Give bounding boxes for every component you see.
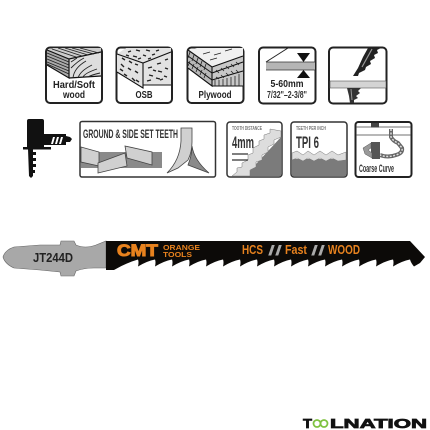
icon: teeth per inch [291, 122, 347, 177]
panel: ground and side set teeth [80, 122, 216, 177]
jigsaw blade [3, 241, 425, 276]
value: 4mm: 4mm [232, 133, 254, 152]
arrow: top thickness [297, 53, 310, 62]
icon: coarse curve: Coarse Curve [359, 163, 394, 175]
arrow: bottom thickness [297, 70, 310, 78]
icon: blade cut [329, 48, 386, 104]
heading: ground and side set teeth: GROUND & SIDE SET TEETH [83, 127, 178, 141]
label: OSB: OSB [136, 89, 153, 101]
blade body [106, 241, 425, 270]
blade part number: JT244D [33, 251, 73, 265]
blade spec: HCS: HCS [242, 243, 263, 257]
divider slashes: // [311, 242, 325, 258]
blade spec: WOOD: WOOD [328, 243, 360, 257]
value: TPI 6: TPI 6 [296, 133, 319, 152]
label: Plywood: Plywood [198, 89, 232, 101]
icon: plywood [188, 48, 244, 103]
label: tooth distance: TOOTH DISTANCE [232, 126, 262, 132]
icon: hard/soft wood [46, 48, 102, 103]
divider slashes: // [268, 242, 282, 258]
blade shank [3, 241, 106, 276]
blade spec: Fast: Fast [285, 243, 308, 257]
label: Hard/Soft wood: Hard/Soft [53, 79, 95, 91]
icon: hard/soft wood: wood [62, 89, 85, 101]
icon: tooth distance [227, 122, 282, 177]
label: teeth per inch: TEETH PER INCH [296, 126, 326, 132]
brand: orange tools: ORANGE [163, 243, 200, 252]
icon: OSB [116, 48, 172, 103]
icon: jigsaw [23, 119, 72, 178]
brand: CMT: CMT [117, 242, 158, 260]
label: 5-60mm: 5-60mm [270, 78, 304, 90]
icon: cutting thickness: 7/32"–2-3/8" [267, 90, 307, 101]
jigsaw blade: TOOLS [163, 250, 192, 259]
icon: cutting thickness [259, 48, 316, 104]
icon: coarse curve [356, 122, 412, 177]
logo: Toolnation [303, 417, 427, 430]
